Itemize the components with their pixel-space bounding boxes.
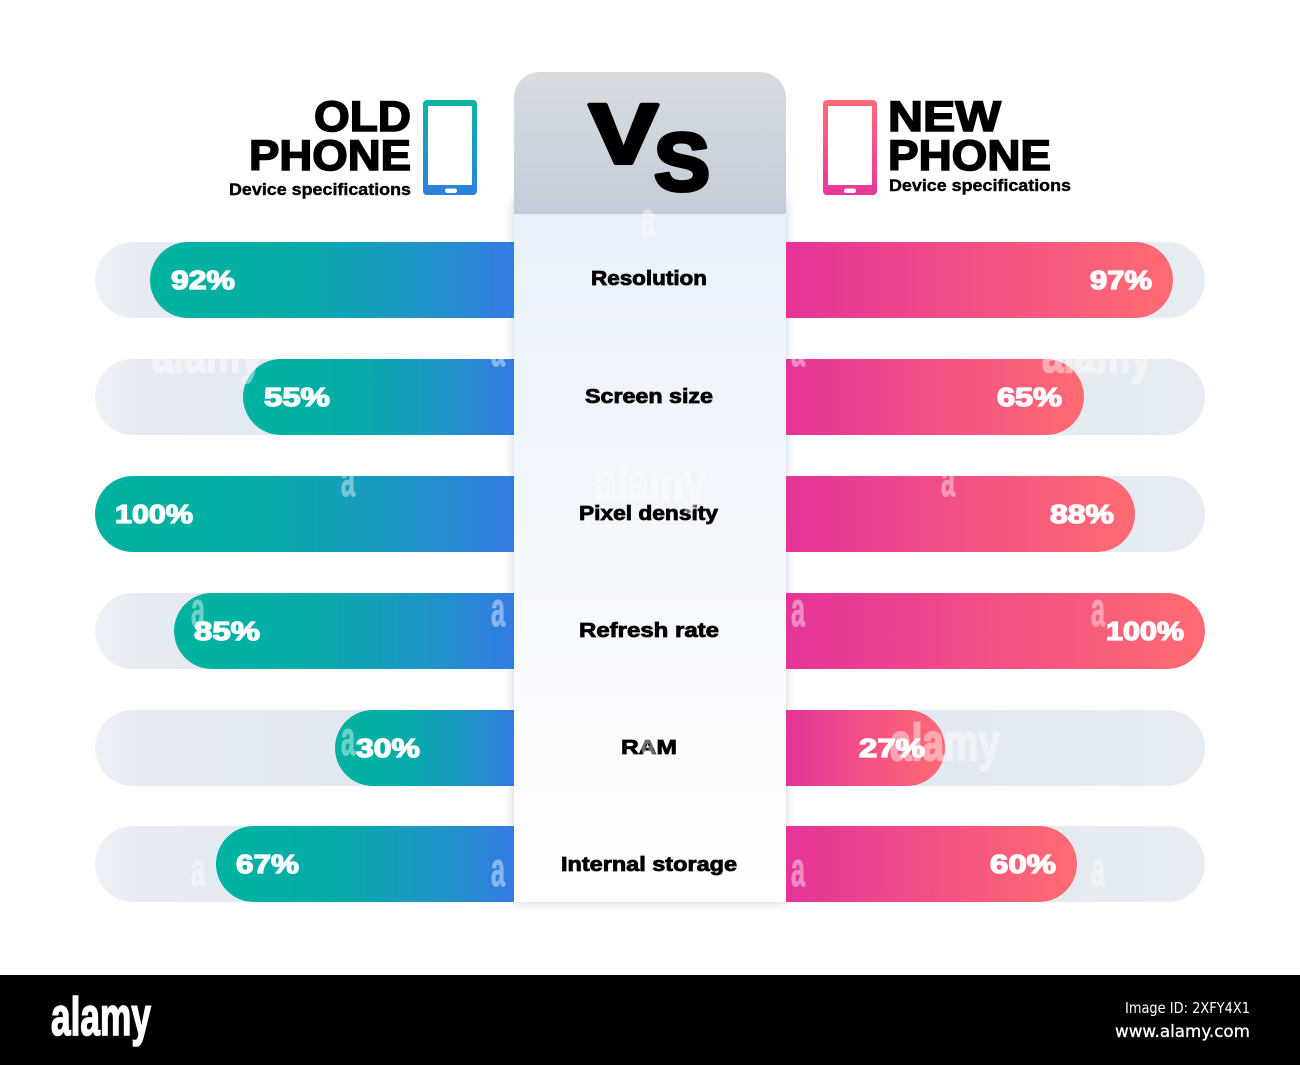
watermarks: a xyxy=(791,324,805,377)
label screen size: Screen size xyxy=(585,386,713,408)
new value 27%: 27% xyxy=(859,733,925,763)
center column body xyxy=(514,200,786,902)
label internal storage: Internal storage xyxy=(561,854,737,876)
footer logo: alamy xyxy=(51,987,151,1047)
watermarks: a xyxy=(791,844,805,897)
VS mark: S xyxy=(654,117,710,208)
label pixel density: Pixel density xyxy=(579,503,719,525)
watermarks: alamy xyxy=(1042,326,1152,384)
new phone bar 65% xyxy=(786,359,1084,435)
row: screen size xyxy=(243,359,1084,435)
old value 30%: 30% xyxy=(356,733,420,763)
new phone bar 88% xyxy=(786,476,1135,552)
row: refresh rate xyxy=(174,593,1205,669)
center column header xyxy=(514,72,786,214)
label resolution: Resolution xyxy=(591,268,707,290)
watermarks: alamy xyxy=(152,326,262,384)
watermarks: alamy xyxy=(595,454,705,512)
old phone bar 55% xyxy=(243,359,514,435)
watermarks: a xyxy=(491,844,505,897)
image id: Image ID: 2XFY4X1 xyxy=(1125,999,1250,1017)
label ram: RAM xyxy=(621,737,677,759)
VS mark xyxy=(589,87,710,208)
row: resolution xyxy=(150,242,1173,318)
row: ram xyxy=(335,710,945,786)
new phone heading xyxy=(888,93,1071,195)
old value 92%: 92% xyxy=(171,265,235,295)
watermarks: a xyxy=(791,584,805,637)
old phone heading xyxy=(229,93,411,199)
watermarks: a xyxy=(1091,584,1105,637)
old phone heading: OLD xyxy=(314,93,411,141)
row: pixel density xyxy=(95,476,1135,552)
watermarks: a xyxy=(941,454,955,507)
old value 55%: 55% xyxy=(264,382,330,412)
watermarks: alamy xyxy=(890,714,1000,772)
watermarks xyxy=(152,194,1152,897)
watermarks: a xyxy=(491,584,505,637)
new phone heading: PHONE xyxy=(888,132,1051,180)
old value 85%: 85% xyxy=(194,616,260,646)
label refresh rate: Refresh rate xyxy=(579,620,719,642)
new value 97%: 97% xyxy=(1090,265,1152,295)
new value 65%: 65% xyxy=(997,382,1062,412)
watermarks: a xyxy=(641,194,655,247)
old phone heading: PHONE xyxy=(249,132,411,180)
watermarks: a xyxy=(341,454,355,507)
watermarks: a xyxy=(191,844,205,897)
website: www.alamy.com xyxy=(1115,1022,1250,1042)
new value 100%: 100% xyxy=(1106,616,1184,646)
old phone bar 30% xyxy=(335,710,514,786)
watermarks: a xyxy=(491,324,505,377)
icon: old phone xyxy=(423,100,477,195)
old value 100%: 100% xyxy=(115,499,193,529)
footer bar xyxy=(0,975,1300,1065)
row: internal storage xyxy=(216,826,1077,902)
watermarks: a xyxy=(1091,844,1105,897)
new value 60%: 60% xyxy=(990,849,1056,879)
old phone bar 100% xyxy=(95,476,514,552)
old phone bar 67% xyxy=(216,826,514,902)
old phone bar 85% xyxy=(174,593,514,669)
new phone bar 60% xyxy=(786,826,1077,902)
new value 88%: 88% xyxy=(1050,499,1114,529)
watermarks: a xyxy=(641,713,655,766)
icon: new phone xyxy=(823,100,877,195)
background tracks xyxy=(95,242,1205,902)
watermarks: a xyxy=(191,584,205,637)
new phone heading: NEW xyxy=(888,93,1001,141)
panel: center column xyxy=(514,72,786,902)
new phone bar 27% xyxy=(786,710,945,786)
new phone bar 100% xyxy=(786,593,1205,669)
old value 67%: 67% xyxy=(236,849,299,879)
VS mark: V xyxy=(589,87,658,181)
new phone heading: Device specifications xyxy=(889,176,1071,195)
new phone bar 97% xyxy=(786,242,1173,318)
old phone heading: Device specifications xyxy=(229,180,411,199)
old phone bar 92% xyxy=(150,242,514,318)
watermarks: a xyxy=(341,713,355,766)
